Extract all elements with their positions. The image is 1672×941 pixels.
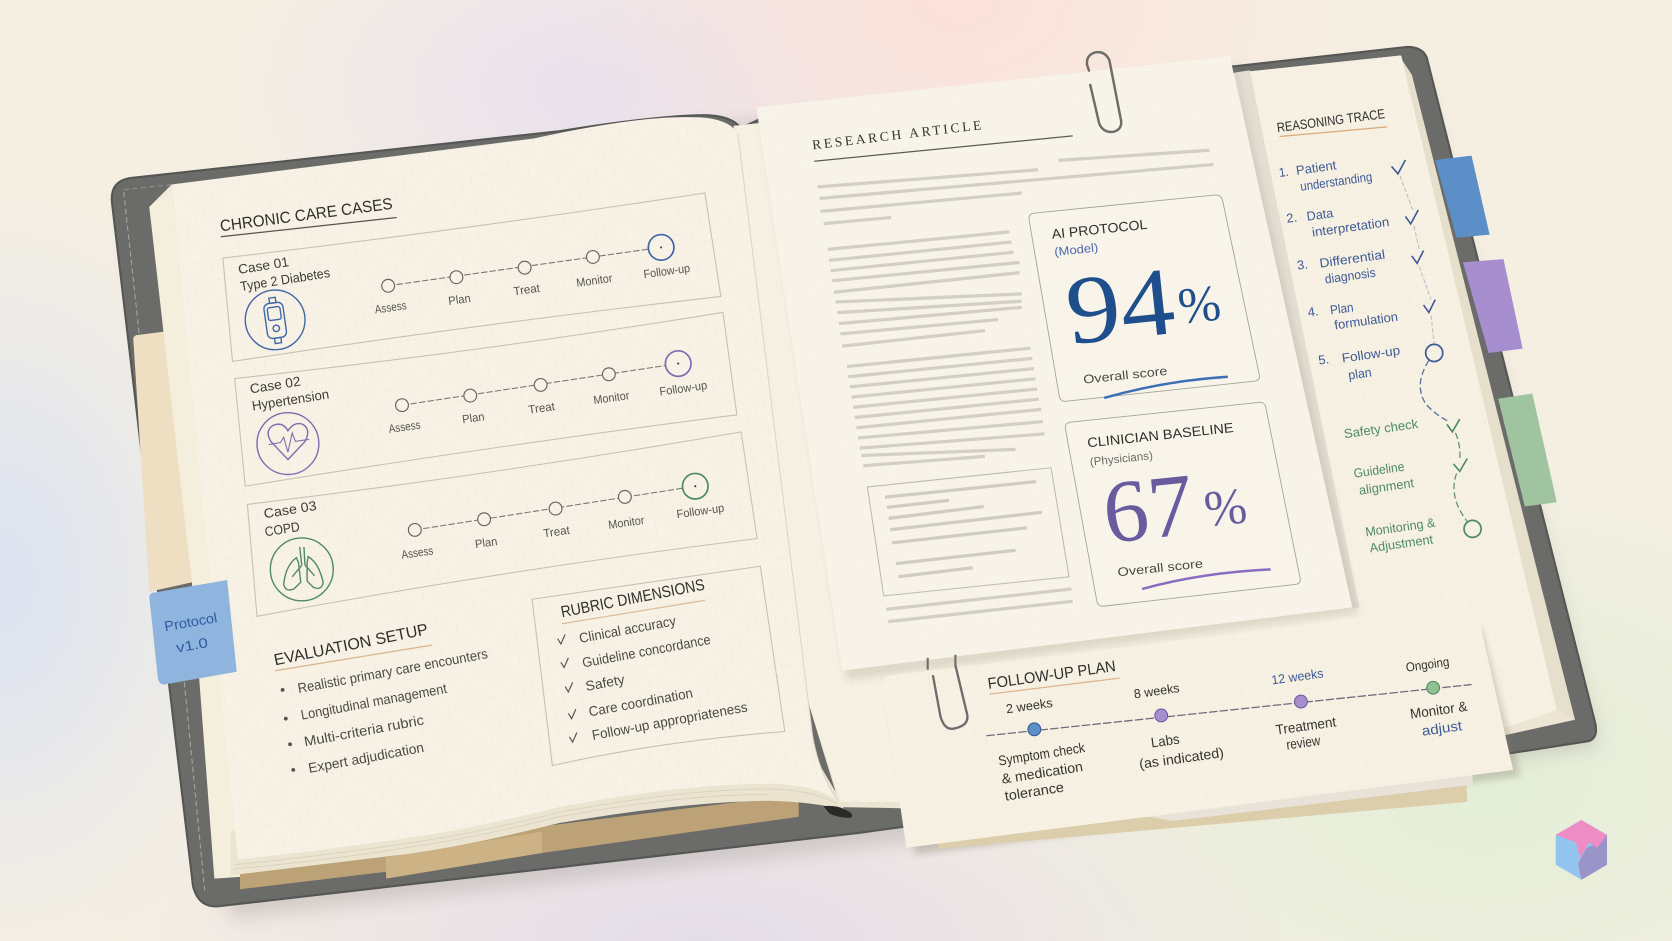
heading: research article: RESEARCH ARTICLE [811, 117, 983, 152]
card: AI protocol: (Model) [1054, 240, 1099, 259]
reasoning steps: 3. [1296, 256, 1309, 273]
case 02 row [235, 312, 737, 486]
icon: top of paperclip [928, 655, 955, 670]
rubric checklist: Clinical accuracy [578, 612, 677, 646]
reasoning steps: formulation [1333, 309, 1399, 332]
heading: research article [811, 117, 1073, 161]
case 01 row: Case 01 [237, 254, 290, 277]
strip paper [883, 605, 1513, 848]
evaluation list: Longitudinal management [299, 680, 448, 723]
panel: research article [756, 52, 1358, 681]
timeline: case 02: Treat [528, 400, 556, 417]
article body text lines [818, 150, 1214, 622]
evaluation list: Multi-criteria rubric [303, 711, 425, 749]
icon: glucose meter [245, 290, 305, 350]
reasoning steps: 5. [1317, 351, 1330, 368]
time labels [1005, 654, 1450, 716]
reasoning steps: Differential [1318, 247, 1386, 271]
tab: green [1498, 393, 1557, 506]
tab: blue [1435, 156, 1490, 238]
case 01 row [223, 193, 721, 361]
reasoning steps: Patient [1295, 157, 1338, 178]
reasoning steps: 1. [1278, 164, 1289, 180]
rubric checklist [558, 612, 749, 743]
index tabs [1435, 156, 1557, 506]
timeline: case 03: Follow-up [676, 502, 725, 521]
timeline: case 01: Monitor [576, 272, 613, 290]
panel: rubric dimensions [532, 566, 785, 766]
article figure box [867, 468, 1069, 596]
score: 67%: % [1202, 478, 1250, 538]
sticky note: protocol version [149, 580, 237, 685]
trace checkmarks and path [1392, 160, 1481, 537]
task labels: adjust [1421, 717, 1463, 739]
tab: purple [1463, 259, 1523, 353]
case 01 row: Type 2 Diabetes [239, 265, 331, 294]
timeline: case 02: Follow-up [659, 379, 708, 399]
card: clinician baseline: Overall score [1117, 556, 1204, 579]
timeline: case 01: Treat [513, 282, 542, 298]
case 03 row [247, 432, 757, 616]
time labels: 2 weeks [1005, 695, 1053, 716]
reasoning steps: plan [1347, 364, 1373, 383]
score: 94%: % [1175, 275, 1224, 336]
panel: chronic care cases [219, 193, 757, 616]
score: 67% [1098, 456, 1250, 563]
reasoning steps: 2. [1285, 209, 1298, 226]
panel: follow-up plan [883, 605, 1521, 855]
reasoning steps: interpretation [1311, 214, 1390, 240]
left page bottom stack [230, 640, 845, 875]
sticky note: protocol version: v1.0 [175, 634, 209, 656]
timeline: case 03: Plan [474, 535, 498, 551]
rubric checklist: Follow-up appropriateness [591, 698, 749, 743]
tan insert sheet [133, 332, 197, 592]
time labels: 8 weeks [1133, 680, 1180, 701]
task labels: Monitor & [1409, 698, 1469, 722]
task labels: tolerance [1004, 779, 1065, 804]
task labels: & medication [1000, 758, 1084, 787]
icon: bottom paperclip [933, 665, 967, 729]
reasoning steps: 4. [1307, 303, 1319, 320]
time labels: Ongoing [1405, 654, 1450, 675]
task labels [997, 698, 1469, 804]
reasoning steps: diagnosis [1324, 265, 1377, 287]
icon: lungs [270, 538, 333, 601]
reasoning steps [1278, 157, 1437, 555]
task labels: review [1285, 732, 1322, 753]
task labels: (as indicated) [1138, 744, 1225, 772]
rubric checklist: Guideline concordance [581, 631, 712, 670]
case 02 row: Hypertension [251, 386, 330, 413]
score: 94%: 94 [1061, 247, 1180, 366]
timeline: case 03: Treat [542, 524, 571, 540]
case 03 row: COPD [264, 519, 301, 539]
reasoning steps: Plan [1329, 299, 1354, 318]
spine gap [823, 806, 852, 818]
card: AI protocol: AI PROTOCOL [1051, 217, 1149, 242]
heading: follow-up plan: FOLLOW-UP PLAN [987, 658, 1117, 693]
timeline: case 03: Monitor [607, 514, 645, 532]
reasoning steps: Monitoring & [1364, 515, 1437, 539]
card: clinician baseline [1065, 402, 1300, 606]
reasoning steps: understanding [1299, 169, 1373, 194]
card: clinician baseline: (Physicians) [1089, 450, 1154, 469]
rubric checklist: Care coordination [587, 685, 694, 719]
evaluation list: Realistic primary care encounters [296, 645, 489, 696]
icon: paperclip [1087, 52, 1121, 132]
evaluation list [281, 645, 489, 776]
timeline: case 03: Assess [401, 544, 434, 562]
card: AI protocol [1029, 195, 1259, 401]
timeline: case 02: Monitor [593, 389, 630, 407]
timeline: case 02: Plan [461, 410, 485, 426]
sticky note: protocol version: Protocol [163, 609, 218, 634]
timeline: case 01: Plan [448, 292, 472, 308]
timeline: case 01 [374, 235, 691, 316]
task labels: Treatment [1275, 713, 1337, 738]
panel: evaluation setup [273, 621, 489, 776]
panel: rubric dimensions: RUBRIC DIMENSIONS [559, 577, 706, 621]
timeline: case 02: Assess [388, 419, 421, 436]
left page stack [149, 184, 256, 874]
evaluation list: Expert adjudication [307, 739, 425, 776]
heading: reasoning trace: REASONING TRACE [1276, 106, 1386, 135]
panel: evaluation setup: EVALUATION SETUP [273, 621, 430, 669]
left page [172, 117, 837, 859]
papers under the strip [938, 766, 1473, 849]
timeline: case 01: Assess [374, 299, 408, 316]
timeline: case 02 [388, 351, 708, 436]
reasoning steps: Guideline [1353, 459, 1405, 481]
heading: chronic care cases: CHRONIC CARE CASES [219, 196, 394, 235]
score: 94% [1061, 247, 1224, 366]
card: AI protocol: Overall score [1083, 364, 1168, 387]
task labels: Labs [1150, 731, 1181, 750]
rubric checklist: Safety [584, 671, 626, 694]
task labels: Symptom check [997, 739, 1086, 769]
timeline: case 03 [401, 473, 725, 562]
card: clinician baseline: CLINICIAN BASELINE [1087, 420, 1234, 450]
reasoning steps: Follow-up [1341, 342, 1401, 366]
case 03 row: Case 03 [263, 498, 318, 521]
reasoning steps: alignment [1358, 475, 1415, 498]
right page [734, 55, 1575, 808]
case 02 row: Case 02 [249, 374, 302, 396]
timeline: follow-up [986, 681, 1472, 736]
logo: hexagon cube [1556, 820, 1607, 880]
reasoning steps: Safety check [1343, 416, 1420, 441]
reasoning steps: Adjustment [1369, 531, 1434, 555]
score: 67%: 67 [1098, 456, 1198, 563]
tan sheets under left page [240, 794, 799, 889]
timeline: case 01: Follow-up [643, 262, 691, 281]
time labels: 12 weeks [1270, 665, 1324, 688]
panel: reasoning trace [1235, 70, 1481, 608]
reasoning steps: Data [1306, 205, 1335, 224]
icon: heart [257, 413, 319, 474]
